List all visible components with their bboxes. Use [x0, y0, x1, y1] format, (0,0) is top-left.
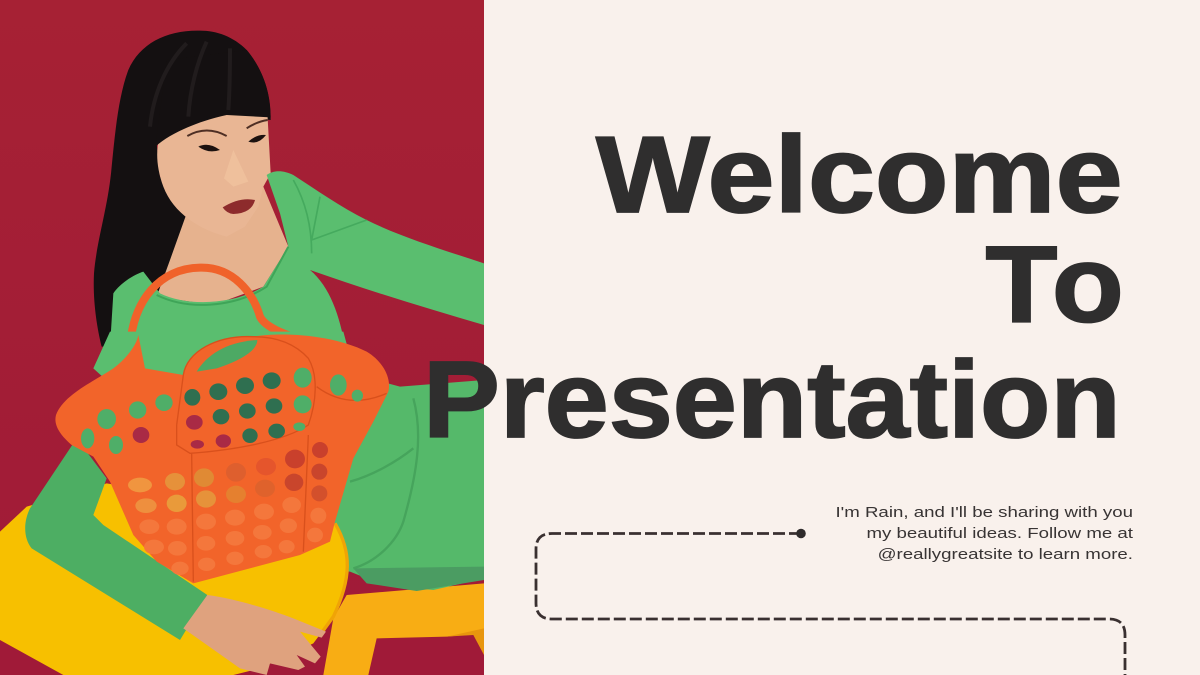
- front holes: [128, 442, 328, 575]
- hair: [94, 31, 271, 347]
- orange basket: [55, 335, 389, 583]
- title: [423, 114, 1127, 460]
- table rim: [320, 523, 347, 635]
- eyes: [187, 120, 268, 151]
- dashed connector line: [536, 529, 1125, 675]
- crimson holes: [133, 415, 231, 449]
- nose highlight: [224, 150, 248, 187]
- dark holes: [184, 372, 285, 443]
- lower scene: [0, 332, 484, 675]
- basket body: [55, 335, 389, 583]
- upper body of woman: [94, 31, 484, 347]
- yellow stool: [323, 583, 484, 675]
- skirt shadow: [353, 567, 484, 591]
- hand: [183, 595, 326, 675]
- fringe: [155, 50, 271, 147]
- left arm: [25, 438, 207, 640]
- intro text: [835, 504, 1133, 563]
- skirt folds: [350, 398, 418, 568]
- intro line 1: I'm Rain, and I'll be sharing with you: [835, 504, 1133, 521]
- green top and raised arm: [110, 171, 484, 347]
- green skirt: [334, 380, 484, 590]
- title line: Presentation: Presentation: [423, 338, 1121, 460]
- hair shine: [150, 42, 230, 127]
- title line: To: To: [986, 223, 1127, 346]
- title line: Welcome: Welcome: [596, 114, 1123, 236]
- intro line 3: @reallygreatsite to learn more.: [878, 546, 1133, 563]
- face: [157, 115, 271, 216]
- photo: woman with orange basket: [0, 0, 484, 675]
- basket back handle: [128, 264, 291, 332]
- connector dot: [796, 529, 806, 538]
- intro line 2: my beautiful ideas. Follow me at: [866, 525, 1133, 542]
- handle opening: [197, 340, 257, 372]
- neck and chest: [157, 187, 288, 305]
- torso: [93, 332, 347, 376]
- photo red backdrop: [0, 0, 484, 675]
- sleeve seam: [293, 180, 367, 253]
- right cream panel: [484, 0, 1200, 675]
- neckline: [157, 247, 288, 305]
- lips: [223, 199, 255, 214]
- handle and rim ridges: [177, 337, 387, 582]
- upper holes: [81, 368, 363, 454]
- yellow round table: [0, 483, 347, 675]
- stool far leg: [447, 628, 484, 655]
